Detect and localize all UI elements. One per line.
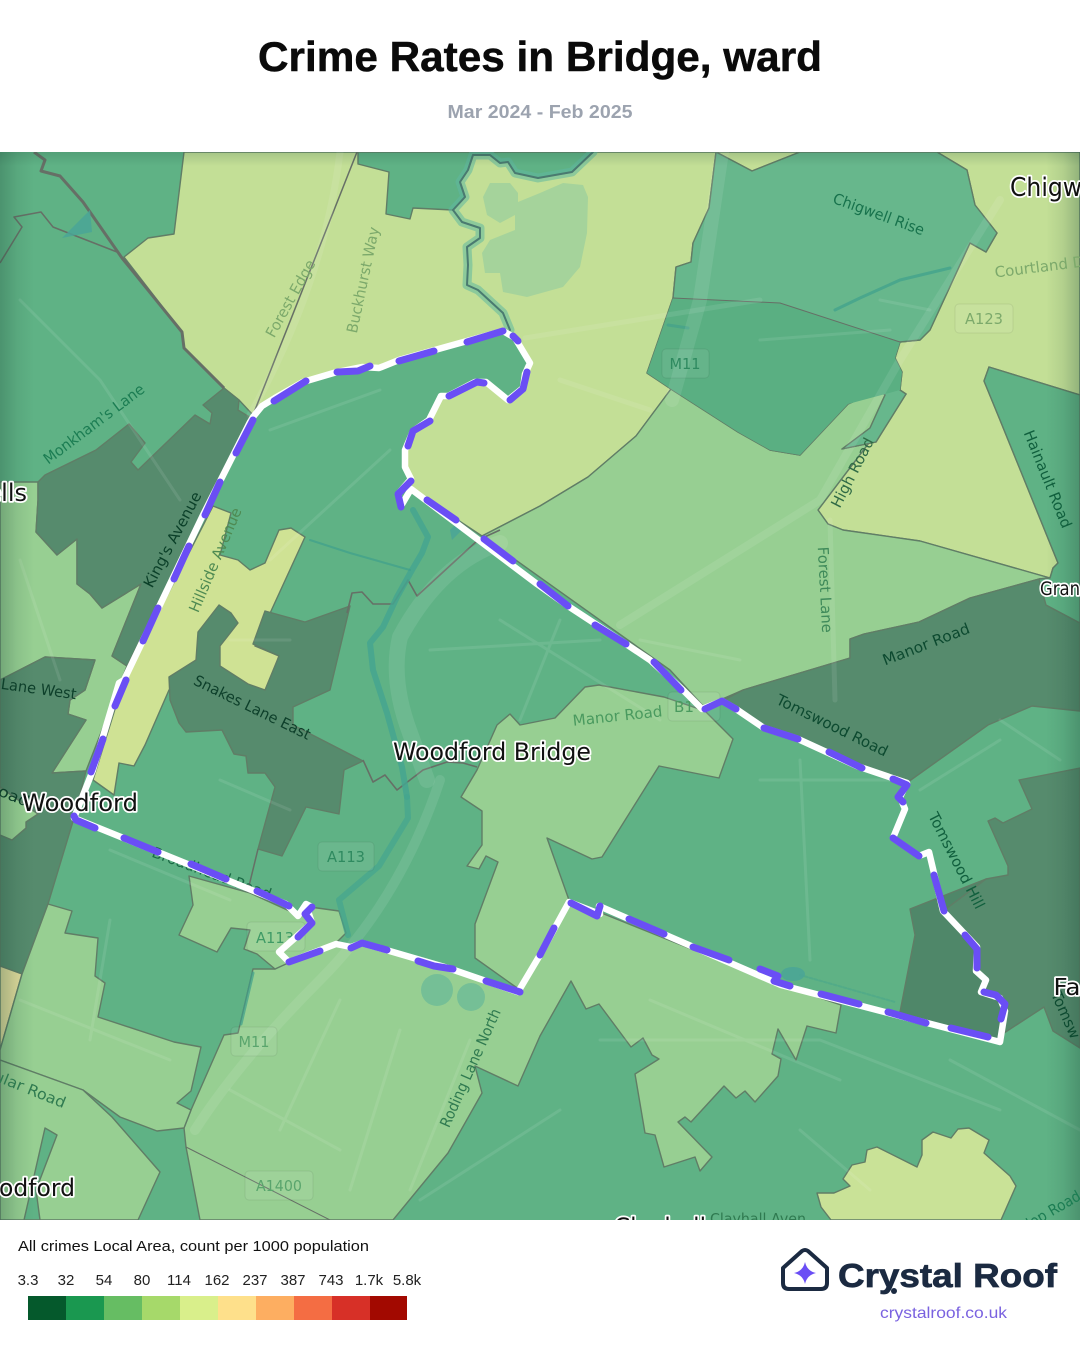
legend tick labels: 114 xyxy=(167,1272,191,1289)
roads xyxy=(20,152,1080,1200)
legend tick labels: 1.7k xyxy=(355,1272,384,1289)
road shields xyxy=(231,304,1013,1200)
area: west light green xyxy=(0,482,141,773)
area: Snakes Lane dark xyxy=(169,605,363,856)
road labels: B1 xyxy=(674,698,694,716)
boundary lines xyxy=(0,152,900,1220)
title: Crime Rates in Bridge, ward xyxy=(258,33,822,80)
legend tick labels: 743 xyxy=(318,1272,344,1289)
area: north notch medium green xyxy=(358,152,593,219)
area: Chigwell Rise medium green xyxy=(647,152,997,455)
road labels: A123 xyxy=(965,310,1003,328)
area: Hillside Avenue yellow strip xyxy=(93,506,305,795)
area: central light green xyxy=(482,389,1050,708)
area: King's Avenue dark xyxy=(36,388,251,666)
area: bottom-left medium strip xyxy=(24,1128,57,1220)
road labels: A113 xyxy=(327,848,365,866)
lake xyxy=(482,183,588,297)
icon: house with star xyxy=(783,1250,827,1289)
legend tick labels: 5.8k xyxy=(393,1272,422,1289)
place labels: Fa xyxy=(1054,975,1080,1001)
legend tick labels: 80 xyxy=(134,1272,150,1289)
legend tick labels: 237 xyxy=(242,1272,268,1289)
road labels: Forest Edge xyxy=(262,257,319,341)
legend tick labels: 32 xyxy=(58,1272,74,1289)
area: Manor Road dark xyxy=(722,579,1080,782)
ponds xyxy=(62,210,805,981)
logo wordmark: Crystal Roof xyxy=(838,1257,1058,1294)
area: ward corner dark xyxy=(900,879,1005,1042)
legend tick labels: 162 xyxy=(204,1272,230,1289)
road labels: Forest Lane xyxy=(814,546,836,633)
area: Woodford light sliver xyxy=(0,787,38,840)
road labels: Hillside Avenue xyxy=(185,505,246,615)
road labels: M11 xyxy=(238,1033,270,1051)
road labels: Broadhead Road xyxy=(149,843,274,903)
road labels: M11 xyxy=(670,355,700,373)
subtitle: date range: Mar 2024 - Feb 2025 xyxy=(448,102,632,122)
road labels: Lane West xyxy=(0,675,78,703)
ward boundary xyxy=(74,331,1005,1042)
edge shading xyxy=(0,152,1080,1220)
area: south-west light green xyxy=(0,904,201,1131)
area: east dark xyxy=(943,768,1080,1048)
place labels xyxy=(0,173,1080,1241)
area: Manor Road centre light green xyxy=(461,685,733,990)
road labels: Chigwell Rise xyxy=(831,189,927,239)
road labels: Snakes Lane East xyxy=(191,671,314,744)
area: north yellow-green xyxy=(124,152,716,536)
area: east yellow-green xyxy=(818,152,1080,578)
road labels: A113 xyxy=(256,929,294,947)
legend tick labels: 54 xyxy=(96,1272,112,1289)
road labels: A1400 xyxy=(256,1177,302,1195)
road labels: Manor Road xyxy=(880,619,972,669)
road labels: Clayhall Aven xyxy=(710,1210,806,1228)
place labels: Woodford xyxy=(22,789,138,817)
road labels: Tomswood Road xyxy=(773,690,891,760)
road labels: Manor Road xyxy=(572,702,663,730)
area: top yellow sliver xyxy=(716,152,800,171)
legend tick labels xyxy=(18,1272,422,1289)
road labels: Buckhurst Way xyxy=(343,225,383,335)
road labels: High Road xyxy=(827,435,878,511)
area: Chigwell Rise lower shade xyxy=(647,298,902,455)
area: bottom-left light green xyxy=(0,1060,160,1220)
road labels: Roding Lane North xyxy=(436,1006,505,1130)
logo url: crystalroof.co.uk xyxy=(880,1305,1008,1322)
place labels: Woodford Bridge xyxy=(393,738,591,766)
area: south yellow blob xyxy=(817,1128,1016,1220)
legend tick labels: 387 xyxy=(280,1272,306,1289)
area: pale yellow sliver xyxy=(0,966,22,1050)
area: A113 blob light green xyxy=(179,876,346,969)
area: south light green band xyxy=(184,900,841,1220)
logo: Crystal Roof xyxy=(783,1250,1058,1322)
reservoirs xyxy=(421,974,485,1011)
place labels: odford xyxy=(0,1174,75,1202)
legend title: All crimes Local Area, count per 1000 population xyxy=(18,1238,369,1255)
legend tick labels: 3.3 xyxy=(18,1272,38,1289)
place labels: Clayhall xyxy=(614,1213,706,1241)
area: Hainault Road medium green xyxy=(984,367,1080,623)
road labels: Monkham's Lane xyxy=(40,380,148,468)
road labels: Hainault Road xyxy=(1020,428,1075,531)
road labels: Tomswood Hill xyxy=(924,809,989,912)
area: Lane West dark xyxy=(0,657,95,974)
river xyxy=(241,152,950,1024)
road labels xyxy=(0,189,1080,1232)
legend colour scale xyxy=(28,1296,407,1320)
road labels: King's Avenue xyxy=(140,489,205,591)
